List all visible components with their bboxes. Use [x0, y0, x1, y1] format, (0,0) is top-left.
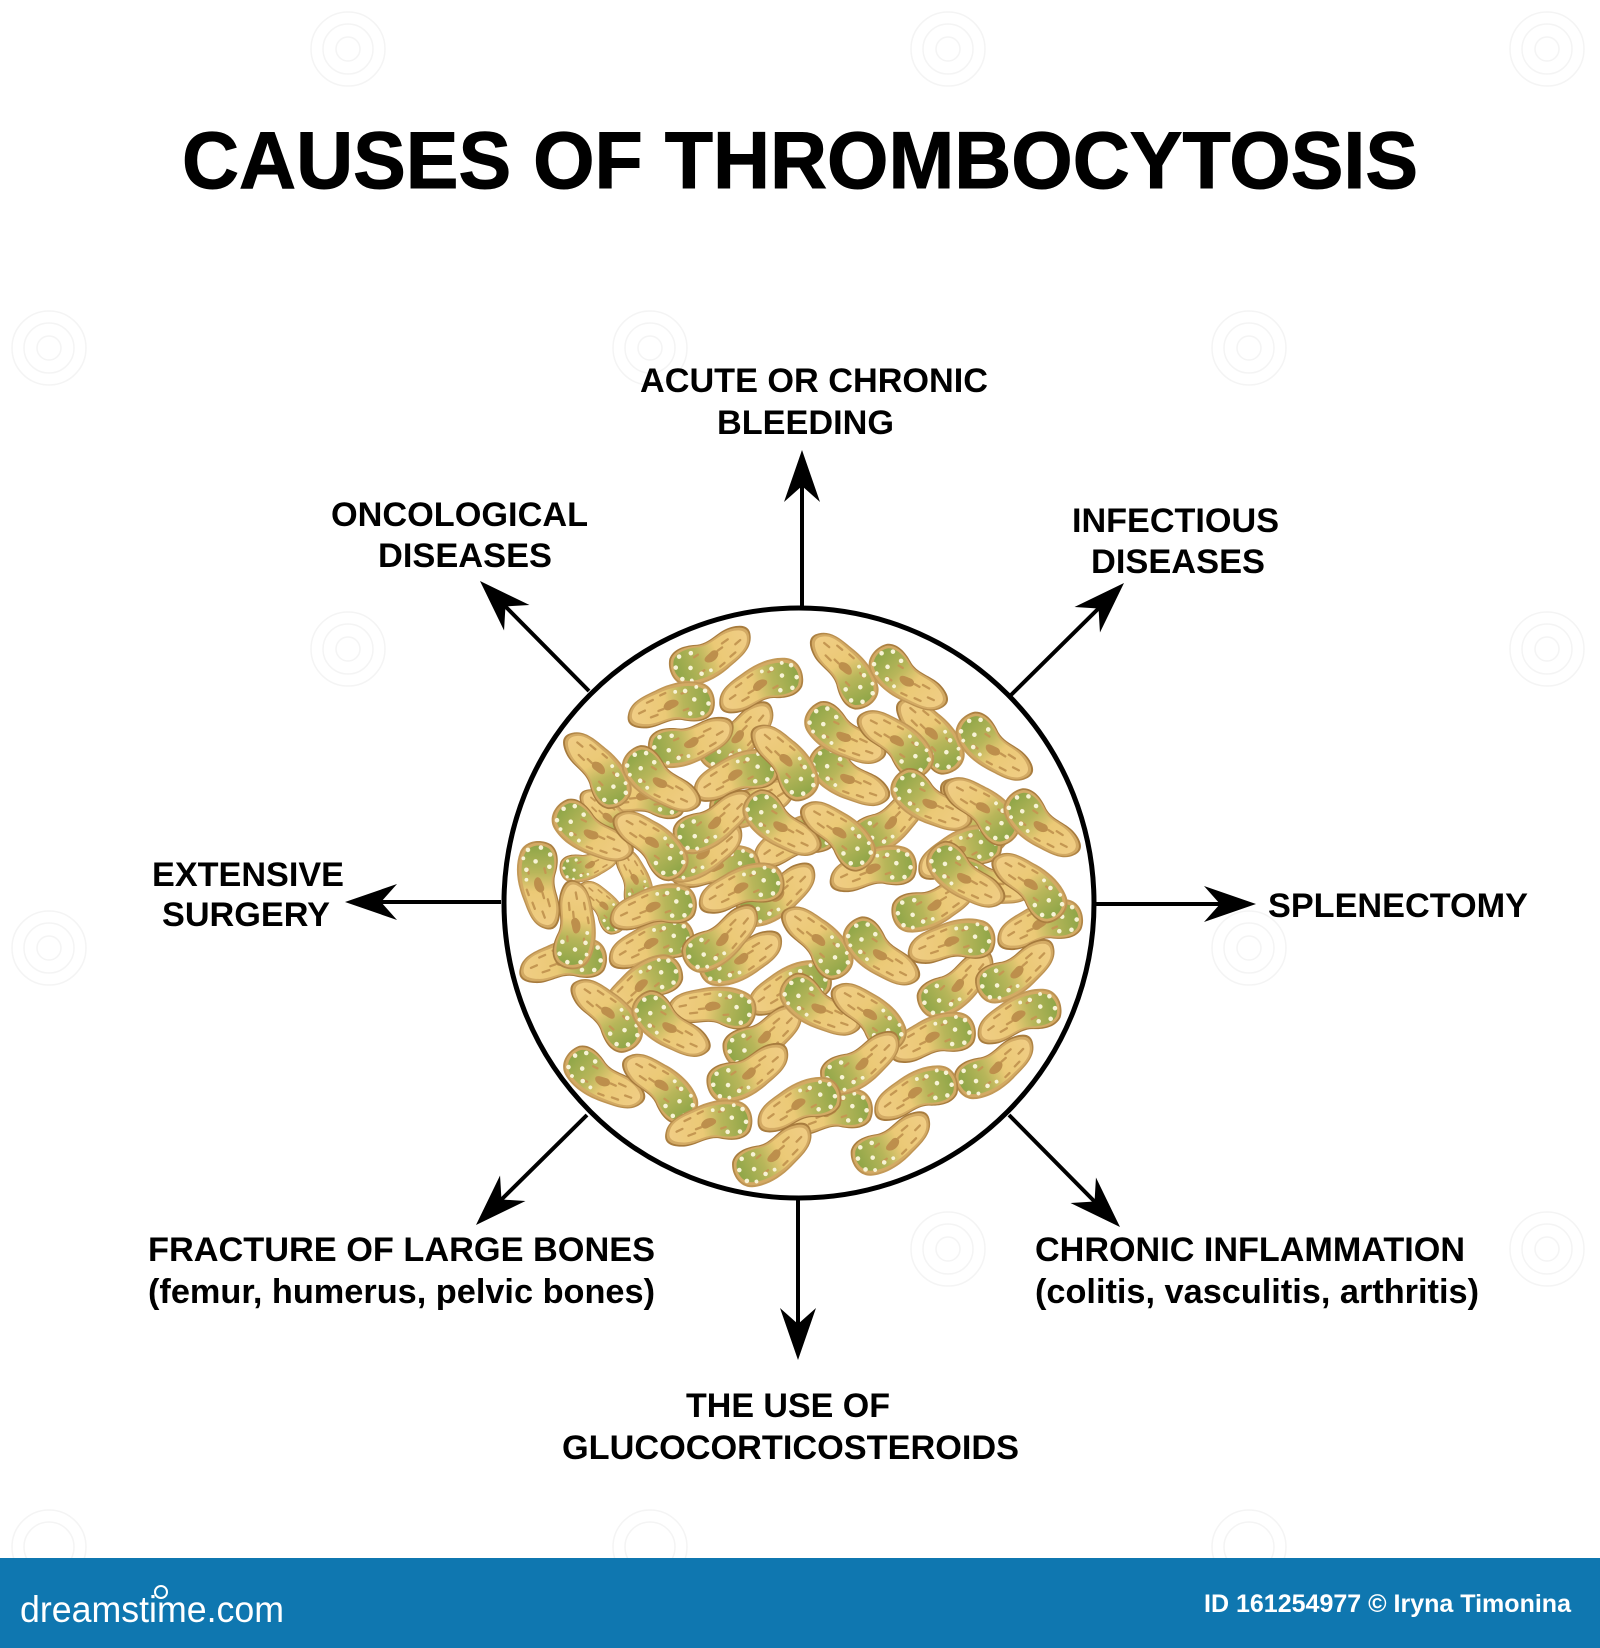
label: the use of glucocorticosteroids [562, 1387, 1019, 1467]
label: acute or chronic bleeding [640, 362, 988, 442]
label: oncological diseases: ONCOLOGICAL [331, 496, 588, 534]
label: infectious diseases [1072, 502, 1279, 581]
arrow: down [780, 1200, 816, 1360]
label: acute or chronic bleeding: ACUTE OR CHRONIC [640, 362, 988, 400]
label: fracture of large bones: FRACTURE OF LARGE BONES [148, 1231, 655, 1269]
label: fracture of large bones: (femur, humerus, pelvic bones) [148, 1273, 655, 1311]
arrow: lower right [1009, 1115, 1133, 1240]
footer credit: ID 161254977 © Iryna Timonina [1204, 1590, 1572, 1618]
footer logo: dreamstime.com [20, 1589, 284, 1630]
label: the use of glucocorticosteroids: THE USE OF [686, 1387, 890, 1425]
arrow: left [345, 884, 501, 920]
label: oncological diseases [331, 496, 588, 575]
label: infectious diseases: INFECTIOUS [1072, 502, 1279, 540]
label: infectious diseases: DISEASES [1091, 543, 1265, 581]
arrow: up [784, 450, 820, 608]
label: chronic inflammation [1035, 1231, 1479, 1311]
platelet cells [517, 619, 1086, 1195]
footer band [0, 1558, 1600, 1648]
title: CAUSES OF THROMBOCYTOSIS [182, 116, 1418, 206]
label: the use of glucocorticosteroids: GLUCOCORTICOSTEROIDS [562, 1429, 1019, 1467]
label: splenectomy: SPLENECTOMY [1268, 887, 1528, 925]
label: extensive surgery: SURGERY [162, 896, 330, 934]
label: oncological diseases: DISEASES [378, 537, 552, 575]
label: extensive surgery: EXTENSIVE [152, 856, 344, 894]
arrow: right [1094, 886, 1256, 922]
label: chronic inflammation: (colitis, vasculitis, arthritis) [1035, 1273, 1479, 1311]
label: chronic inflammation: CHRONIC INFLAMMATION [1035, 1231, 1465, 1269]
arrow: lower left [463, 1115, 587, 1238]
label: fracture of large bones [148, 1231, 655, 1311]
label: acute or chronic bleeding: BLEEDING [717, 404, 894, 442]
circle: platelets under microscope [504, 608, 1094, 1198]
label: extensive surgery [152, 856, 344, 934]
arrow: upper left [467, 568, 589, 691]
arrow: upper right [1010, 570, 1137, 696]
